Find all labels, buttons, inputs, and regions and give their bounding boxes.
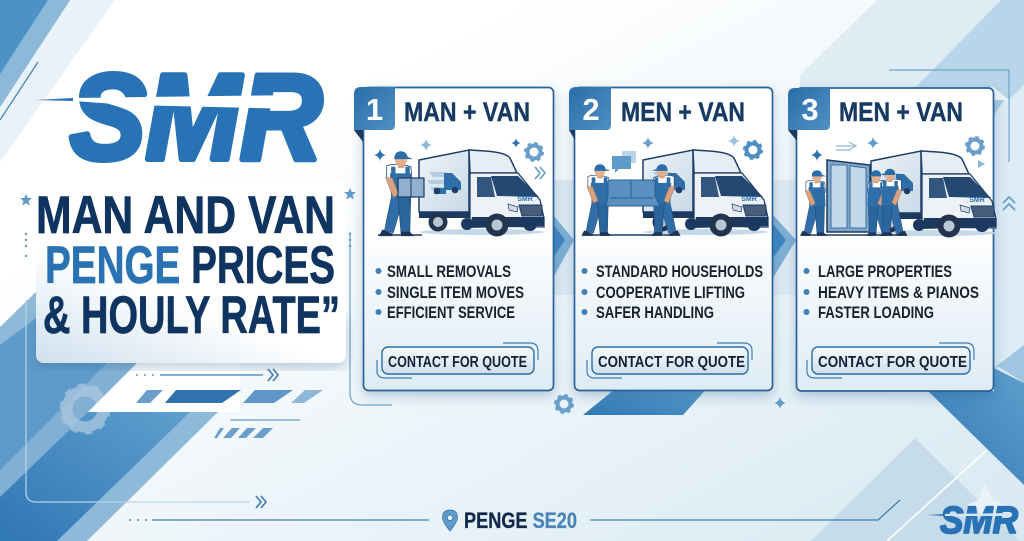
icon: stars and dots beside headline [20,188,356,257]
illustration: two men carrying a sofa beside a van [581,135,768,236]
illustration: three men moving a wardrobe beside a van [800,137,996,238]
illustration: two men carrying a sofa beside a van: SMR [741,196,757,203]
decorative frame and lines, lower left [26,300,429,520]
location text: PENGE SE20 [464,508,577,533]
badge 3 [788,88,830,130]
card 2 button [587,343,752,378]
card 3 button: CONTACT FOR QUOTE [818,354,967,371]
panel: headline [36,180,346,363]
card 1 button: CONTACT FOR QUOTE [388,354,527,371]
heading line 3: & HOULY RATE” [43,286,340,345]
badge 3: 3 [801,92,819,127]
connector frame right of headline [350,232,392,405]
card 2 features: STANDARD HOUSEHOLDS [596,263,763,281]
panel: card 3 [788,88,996,391]
arrow: between cards 2 and 3 [773,180,796,295]
logo: small SMR [927,483,1019,541]
illustration: one man carrying a box beside a van: SMR [517,196,533,203]
white notch over gear [88,363,240,412]
card 3 features: FASTER LOADING [818,304,934,322]
card 2 title: MEN + VAN [621,97,745,127]
card 2 button: CONTACT FOR QUOTE [598,354,745,371]
icon: map pin [442,510,458,531]
card 1 features: SINGLE ITEM MOVES [387,284,524,302]
badge 2 [569,87,611,130]
icon: gear below card 1 [556,396,572,412]
heading line 2: PENGE PRICES [45,236,335,295]
card 3 button [807,343,974,378]
logo: SMR: SMR [70,49,322,185]
badge 2: 2 [582,92,600,127]
decorative parallelogram beneath card 2 [583,385,710,415]
card 1 title: MAN + VAN [404,97,530,127]
panel: card 1 [354,87,554,390]
card 1 features [376,263,524,322]
icon: sparkle below card 2 [774,397,786,409]
card 3 features [804,263,979,322]
card 1 button [377,343,538,378]
progress bars decoration [136,390,323,438]
footer location [442,500,900,533]
badge 1: 1 [366,92,383,127]
card 3 features: LARGE PROPERTIES [818,263,952,281]
card 2 features: COOPERATIVE LIFTING [596,284,745,302]
card 3 features: HEAVY ITEMS & PIANOS [818,284,979,302]
logo: small SMR: SMR [940,500,1019,541]
card 2 features [582,263,763,322]
illustration: three men moving a wardrobe beside a van: SMR [969,197,985,204]
card 1 features: EFFICIENT SERVICE [387,304,515,322]
panel: card 2 [569,87,772,390]
card 2 features: SAFER HANDLING [596,304,714,322]
icon: large gear [63,387,107,431]
arrow: between cards 1 and 2 [553,180,574,295]
illustration: one man carrying a box beside a van [374,138,545,236]
heading line 1: MAN AND VAN [36,186,335,245]
card 1 features: SMALL REMOVALS [387,263,511,281]
card 3 title: MEN + VAN [839,97,963,127]
badge 1 [354,87,395,130]
